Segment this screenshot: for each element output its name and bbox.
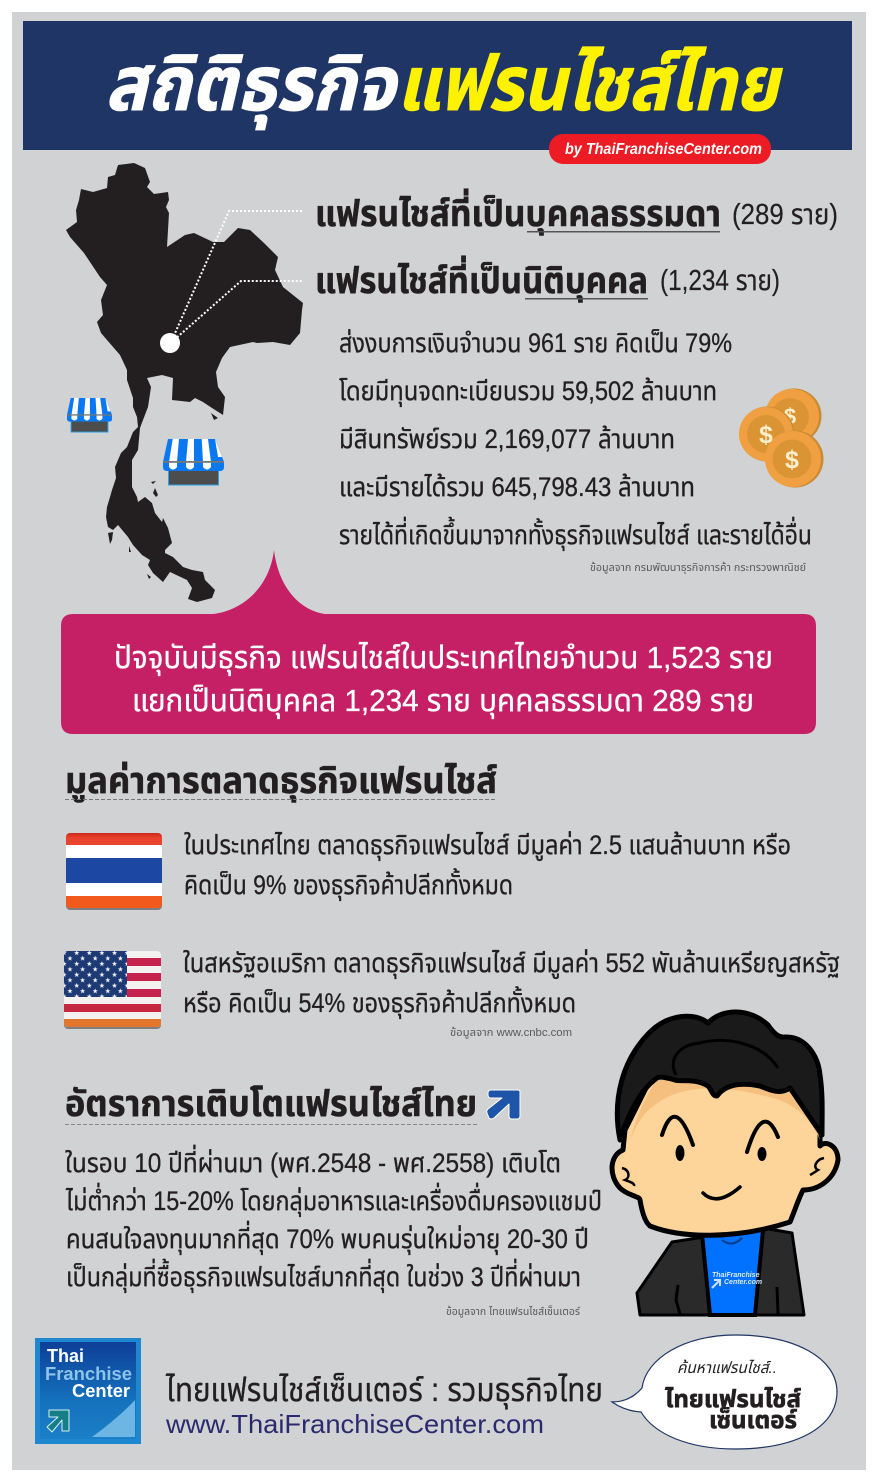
- text block: growth details: ในรอบ 10 ปีที่ผ่านมา (พศ.2548 - พศ.2558) เติบโต: [65, 1144, 561, 1178]
- islands: [108, 413, 218, 579]
- text block: juristic statistics: โดยมีทุนจดทะเบียนรวม 59,502 ล้านบาท: [339, 376, 717, 407]
- text block: Thailand market: ในประเทศไทย ตลาดธุรกิจแฟรนไชส์ มีมูลค่า 2.5 แสนล้านบาท หรือ: [184, 830, 791, 861]
- logo: [35, 1338, 141, 1444]
- heading: growth rate: อัตราการเติบโตแฟรนไชส์ไทย: [65, 1083, 477, 1124]
- callout: pink summary: [61, 550, 816, 734]
- text block: growth details: [65, 1144, 602, 1293]
- logo: Thai: [47, 1346, 84, 1366]
- character illustration: [612, 1012, 838, 1315]
- source note: DBD: ข้อมูลจาก กรมพัฒนาธุรกิจการค้า กระทรวงพาณิชย์: [590, 562, 806, 574]
- heading: individual franchises: แฟรนไชส์ที่เป็นบุคคลธรรมดา: [315, 188, 721, 235]
- jacket: [637, 1228, 804, 1315]
- text block: juristic statistics: มีสินทรัพย์รวม 2,169,077 ล้านบาท: [339, 424, 675, 454]
- byline pill: [549, 134, 771, 164]
- byline pill: by ThaiFranchiseCenter.com: [565, 141, 762, 158]
- text block: growth details: ไม่ต่ำกว่า 15-20% โดยกลุ่มอาหารและเครื่องดื่มครองแชมป์: [65, 1182, 602, 1217]
- title banner: [23, 21, 852, 150]
- map of Thailand: [66, 163, 303, 602]
- text block: Thailand market: [184, 830, 791, 901]
- footer text: www.ThaiFranchiseCenter.com: [165, 1409, 544, 1439]
- eyes: [676, 1145, 684, 1161]
- icon: coins: [739, 388, 824, 488]
- text block: juristic statistics: [339, 328, 812, 551]
- heading: juristic franchises: [315, 255, 780, 302]
- heading: juristic franchises: (1,234 ราย): [660, 265, 780, 297]
- text block: Thailand market: คิดเป็น 9% ของธุรกิจค้าปลีกทั้งหมด: [184, 868, 513, 901]
- icon: coins: $: [759, 421, 773, 449]
- heading: market value: มูลค่าการตลาดธุรกิจแฟรนไชส์: [65, 760, 497, 802]
- source note: CNBC: ข้อมูลจาก www.cnbc.com: [450, 1027, 572, 1039]
- hair: [617, 1012, 822, 1140]
- icon: coins: $: [784, 404, 796, 429]
- icon: coins: $: [785, 446, 799, 474]
- icon: large shop: [163, 439, 224, 485]
- icon: growth arrow: [487, 1090, 520, 1119]
- ear curls: [622, 1158, 824, 1186]
- footer text: ไทยแฟรนไชส์เซ็นเตอร์ : รวมธุรกิจไทย: [165, 1371, 603, 1410]
- text block: juristic statistics: ส่งงบการเงินจำนวน 961 ราย คิดเป็น 79%: [339, 328, 732, 358]
- logo: Center: [72, 1381, 130, 1401]
- logo: Franchise: [45, 1364, 132, 1384]
- text block: growth details: คนสนใจลงทุนมากที่สุด 70% พบคนรุ่นใหม่อายุ 20-30 ปี: [66, 1220, 589, 1255]
- text block: juristic statistics: และมีรายได้รวม 645,798.43 ล้านบาท: [339, 472, 695, 502]
- heading: individual franchises: (289 ราย): [732, 199, 838, 231]
- source note: TFC: ข้อมูลจาก ไทยแฟรนไชส์เซ็นเตอร์: [446, 1306, 580, 1318]
- icon: Thai flag: [66, 833, 162, 910]
- mouth: [703, 1187, 740, 1199]
- speech bubble: เซ็นเตอร์: [709, 1407, 797, 1434]
- text block: US market: หรือ คิดเป็น 54% ของธุรกิจค้าปลีกทั้งหมด: [183, 986, 576, 1019]
- icon: small shop: [67, 398, 112, 432]
- fringe line: [673, 1040, 778, 1075]
- character illustration: Center.com: [724, 1279, 762, 1286]
- heading: juristic franchises: แฟรนไชส์ที่เป็นนิติบุคคล: [315, 255, 648, 302]
- text block: growth details: เป็นกลุ่มที่ซื้อธุรกิจแฟรนไชส์มากที่สุด ในช่วง 3 ปีที่ผ่านมา: [66, 1258, 581, 1293]
- text block: US market: [183, 948, 840, 1019]
- map pin: [160, 333, 180, 353]
- shirt: [702, 1230, 763, 1315]
- speech bubble: ไทยแฟรนไชส์: [665, 1386, 801, 1413]
- speech bubble: ค้นหาแฟรนไชส์..: [677, 1359, 777, 1377]
- title: แฟรนไชส์ไทย: [397, 42, 783, 127]
- character illustration: ThaiFranchise: [712, 1272, 760, 1279]
- face: [612, 1060, 838, 1235]
- callout: pink summary: ปัจจุบันมีธุรกิจ แฟรนไชส์ในประเทศไทยจำนวน 1,523 ราย: [114, 640, 773, 676]
- icon: US flag: [64, 951, 161, 1029]
- forehead shadow: [630, 1075, 820, 1140]
- title: สถิติธุรกิจ: [105, 42, 399, 130]
- callout: pink summary: แยกเป็นนิติบุคคล 1,234 ราย บุคคลธรรมดา 289 ราย: [132, 683, 754, 719]
- title: [105, 42, 783, 130]
- footer text: [165, 1371, 603, 1439]
- connector lines: [172, 211, 303, 340]
- speech bubble: [612, 1335, 837, 1449]
- eyebrows: [662, 1117, 778, 1152]
